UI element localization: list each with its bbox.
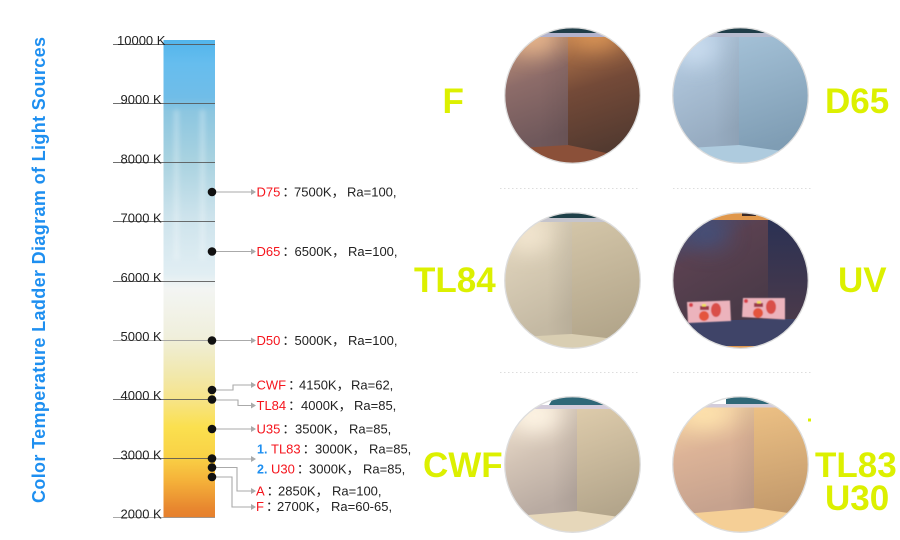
light source labels: Ra=62,	[351, 378, 393, 392]
temperature scale labels: 10000 K	[117, 33, 166, 48]
label: F: F	[442, 82, 464, 121]
light source labels: 3000K，	[309, 462, 360, 476]
temperature scale labels: 7000 K	[120, 210, 162, 226]
light source labels: D75	[256, 184, 280, 200]
light source labels: A	[256, 484, 265, 498]
temperature scale labels: 6000 K	[120, 270, 162, 285]
light source labels: Ra=100,	[347, 184, 397, 200]
banknote left	[687, 300, 731, 323]
light source labels: 4150K，	[299, 378, 350, 392]
light source labels: 5000K，	[294, 333, 345, 348]
light source labels: Ra=85,	[354, 398, 396, 413]
light source labels: Ra=100,	[348, 333, 398, 348]
light source labels: ：	[282, 333, 295, 348]
light source labels: ：	[288, 378, 301, 392]
temperature scale labels: 9000 K	[120, 92, 162, 107]
light source labels: U30	[271, 462, 295, 476]
room photo: D65 light	[672, 27, 809, 170]
temperature scale labels: 8000 K	[120, 152, 162, 166]
chart: color temperature ladder	[113, 33, 411, 522]
temperature scale labels	[117, 33, 166, 522]
light source labels: 2850K，	[278, 484, 329, 498]
light source labels: 4000K，	[301, 398, 352, 413]
light source labels: D50	[256, 333, 280, 348]
light source labels: 6500K，	[294, 244, 345, 259]
light source labels: TL83	[271, 442, 301, 456]
banknote right	[742, 298, 785, 320]
light source labels: CWF	[256, 378, 286, 392]
room photo: F light	[504, 22, 641, 170]
light source labels: Ra=100,	[332, 484, 382, 498]
light source labels: TL84	[256, 398, 286, 413]
temperature scale labels: 4000 K	[120, 388, 162, 403]
light source labels: Ra=85,	[349, 422, 391, 436]
light source labels: ：	[267, 484, 280, 498]
label: TL83: TL83	[815, 446, 897, 485]
light source labels: 3500K，	[295, 422, 346, 436]
marker dots	[208, 188, 216, 481]
light source labels: Ra=85,	[369, 442, 411, 456]
light source labels: U35	[256, 422, 280, 436]
room photo: TL83 / U30 light	[672, 396, 809, 535]
light source labels: 1.	[257, 442, 267, 456]
light source labels: ：	[266, 499, 279, 514]
arrows	[212, 189, 256, 510]
light source labels: Ra=100,	[348, 244, 398, 259]
room photo: TL84 light	[504, 212, 641, 355]
light source labels: Ra=60-65,	[331, 499, 392, 514]
light source labels: F	[256, 499, 264, 514]
light source labels: ：	[288, 398, 301, 413]
light source labels: Ra=85,	[363, 462, 405, 476]
room photo: UV light with banknotes	[672, 212, 809, 351]
label: UV: UV	[838, 261, 887, 300]
temperature scale labels: 5000 K	[120, 329, 162, 344]
light source labels: ：	[282, 244, 295, 259]
label: CWF: CWF	[423, 446, 503, 485]
label: U30: U30	[825, 479, 889, 518]
light source labels: ：	[282, 422, 295, 436]
title: Color Temperature Ladder Diagram of Light Sources	[29, 37, 49, 503]
light source labels: 3000K，	[315, 442, 366, 456]
label: TL84: TL84	[414, 261, 496, 300]
light source labels: ：	[303, 442, 316, 456]
label: D65: D65	[825, 82, 889, 121]
gradient bar	[164, 40, 215, 518]
temperature scale labels: 3000 K	[120, 448, 162, 462]
light source labels: ：	[282, 184, 295, 200]
light source labels: D65	[256, 244, 280, 259]
room photo: CWF light	[504, 396, 641, 535]
light source labels	[256, 184, 411, 514]
light source labels: ：	[297, 462, 310, 476]
temperature scale labels: 2000 K	[120, 506, 162, 522]
light source labels: 2.	[257, 462, 267, 476]
light source labels: 2700K，	[277, 499, 328, 514]
light source labels: 7500K，	[294, 184, 345, 200]
